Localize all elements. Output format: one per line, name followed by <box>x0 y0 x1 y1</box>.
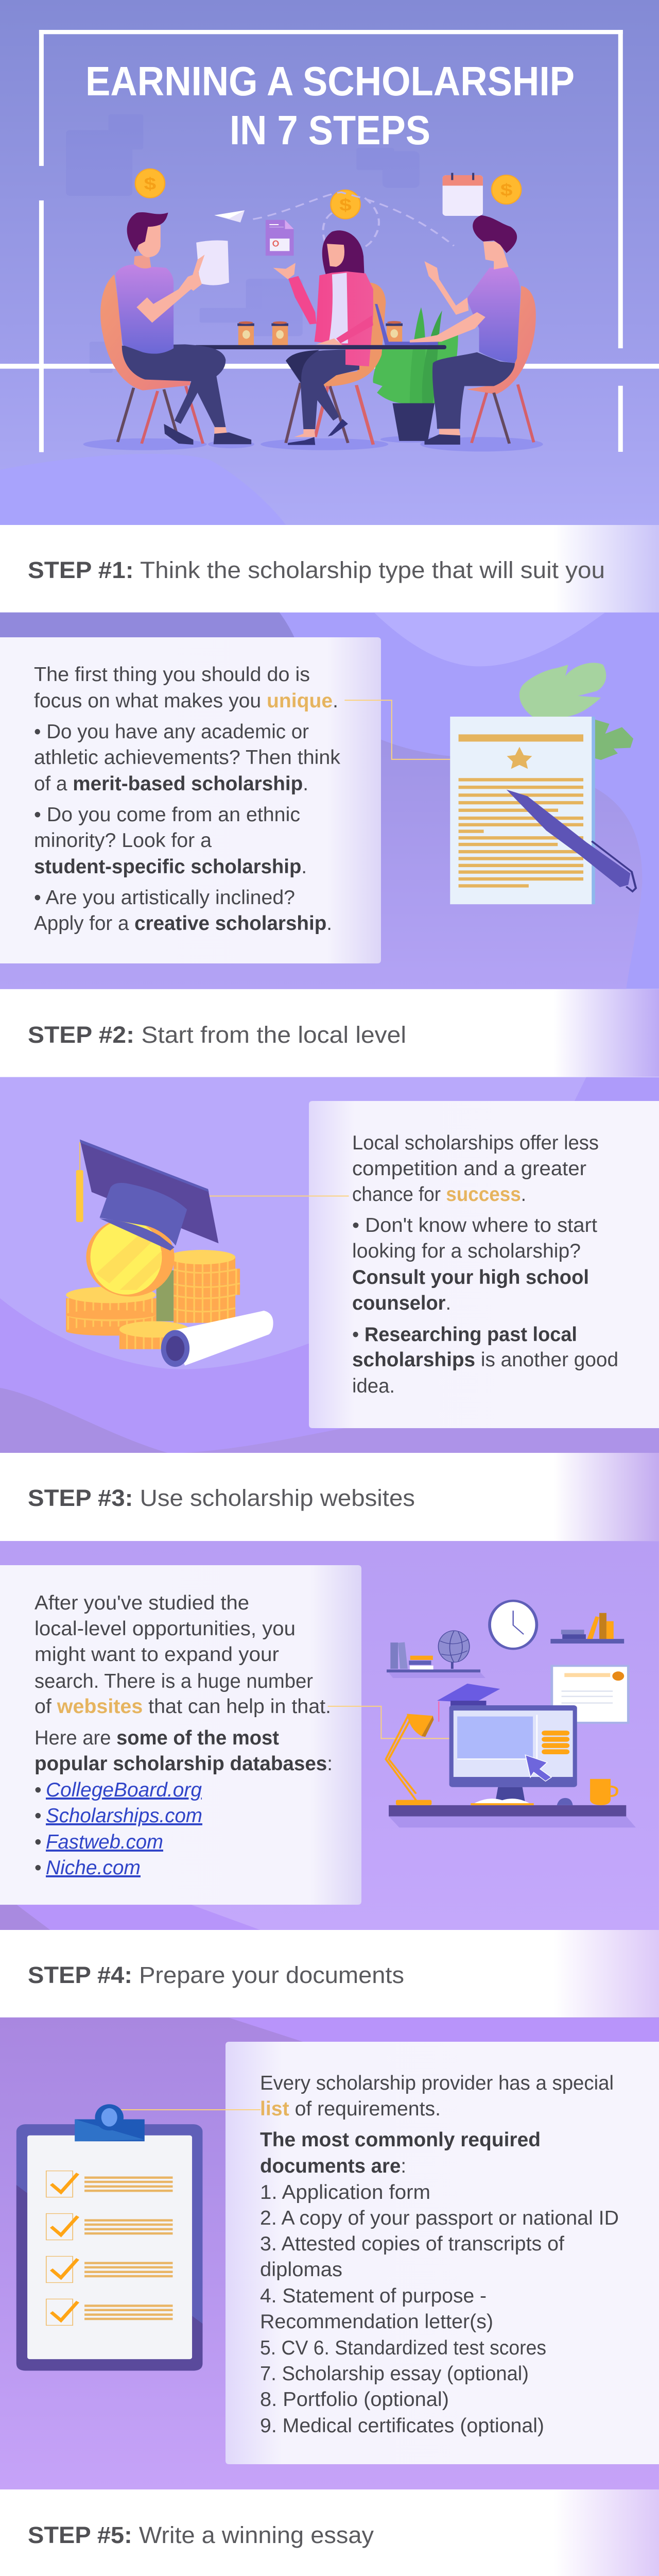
title: IN 7 STEPS <box>230 107 430 153</box>
text card <box>226 2042 659 2464</box>
text card: minority? Look for a <box>34 829 212 852</box>
text card: looking for a scholarship? <box>352 1240 581 1262</box>
text card: competition and a greater <box>352 1158 586 1180</box>
text card: 5. CV 6. Standardized test scores <box>260 2337 546 2359</box>
text card: search. There is a huge number <box>34 1670 313 1692</box>
woman with chair <box>273 230 386 445</box>
text card: focus on what makes you unique. <box>34 690 338 712</box>
text card: 2. A copy of your passport or national ID <box>260 2207 619 2229</box>
text card: of a merit-based scholarship. <box>34 773 308 795</box>
text card: After you've studied the <box>34 1592 249 1614</box>
step 5 heading: STEP #5: Write a winning essay <box>28 2522 374 2548</box>
text card <box>0 1565 361 1905</box>
text card: • Don't know where to start <box>352 1214 597 1236</box>
icon: document and pen <box>344 663 636 904</box>
text card: • <box>34 1805 42 1827</box>
text card: The first thing you should do is <box>34 664 310 686</box>
panel: step 2 <box>0 1077 659 1453</box>
floor shadows <box>83 436 543 451</box>
text card: local-level opportunities, you <box>34 1618 296 1640</box>
step 4 heading <box>0 1930 659 2018</box>
plant <box>373 307 458 441</box>
text card: • Researching past local <box>352 1324 577 1346</box>
text card: Every scholarship provider has a special <box>260 2072 614 2094</box>
text card: CollegeBoard.org <box>46 1779 202 1801</box>
step 4 heading: STEP #4: Prepare your documents <box>28 1962 404 1988</box>
step 5 heading <box>0 2489 659 2576</box>
text card: 3. Attested copies of transcripts of <box>260 2233 564 2255</box>
icon: clipboard checklist <box>16 2104 261 2370</box>
step 1 heading <box>0 525 659 613</box>
text card: documents are: <box>260 2155 406 2177</box>
man right with chair <box>410 215 536 445</box>
hero illustration <box>0 30 659 525</box>
text card: idea. <box>352 1375 395 1397</box>
coins <box>135 169 521 219</box>
man left with chair and paper <box>100 212 251 445</box>
panel: step 3 <box>0 1541 659 1930</box>
text card: • <box>34 1857 42 1879</box>
hero section <box>0 0 659 525</box>
text card: student-specific scholarship. <box>34 856 307 878</box>
text card: athletic achievements? Then think <box>34 747 340 769</box>
text card: list of requirements. <box>260 2098 441 2120</box>
text card: • Do you come from an ethnic <box>34 804 300 826</box>
text card <box>309 1101 659 1428</box>
panel: step 1 <box>0 613 659 989</box>
text card: • <box>34 1779 42 1801</box>
text card: Consult your high school <box>352 1266 589 1289</box>
text card: • Do you have any academic or <box>34 721 309 743</box>
coins: $ <box>144 175 156 194</box>
text card: • Are you artistically inclined? <box>34 887 295 909</box>
text card: The most commonly required <box>260 2129 541 2151</box>
text card: popular scholarship databases: <box>34 1753 333 1775</box>
step 2 heading: STEP #2: Start from the local level <box>28 1022 406 1048</box>
text card: Local scholarships offer less <box>352 1132 599 1154</box>
table with cups and laptop <box>237 321 403 346</box>
text card: scholarships is another good <box>352 1349 618 1371</box>
text card: might want to expand your <box>34 1643 279 1666</box>
dashed flight path <box>253 192 454 249</box>
text card: 4. Statement of purpose - <box>260 2285 487 2307</box>
checklist rows <box>46 2171 172 2325</box>
laptop <box>375 304 438 345</box>
floating document <box>266 220 294 256</box>
panel: step 4 <box>0 2018 659 2489</box>
coins: $ <box>500 181 512 200</box>
text card: counselor. <box>352 1292 451 1314</box>
paper plane <box>214 210 245 223</box>
coins: $ <box>339 196 352 215</box>
text card: Recommendation letter(s) <box>260 2311 493 2333</box>
calendar icon <box>443 173 483 216</box>
text card: Apply for a creative scholarship. <box>34 912 332 935</box>
text card: • <box>34 1831 42 1853</box>
text card: 1. Application form <box>260 2181 430 2204</box>
step 3 heading: STEP #3: Use scholarship websites <box>28 1485 415 1511</box>
text card: Niche.com <box>46 1857 141 1879</box>
text card: Scholarships.com <box>46 1805 202 1827</box>
step 1 heading: STEP #1: Think the scholarship type that will suit you <box>28 557 605 583</box>
text card: 8. Portfolio (optional) <box>260 2388 449 2411</box>
icon: graduation cap, coins and diploma <box>66 1140 349 1367</box>
text card: 9. Medical certificates (optional) <box>260 2415 544 2437</box>
text card: of websites that can help in that. <box>34 1696 331 1718</box>
text card: Here are some of the most <box>34 1727 279 1749</box>
icon: study desk with computer <box>328 1601 636 1827</box>
title <box>85 58 575 153</box>
text card: chance for success. <box>352 1183 526 1206</box>
step 3 heading <box>0 1453 659 1541</box>
picture frame <box>39 30 623 452</box>
text card: Fastweb.com <box>46 1831 163 1853</box>
text card: diplomas <box>260 2259 342 2281</box>
text card: 7. Scholarship essay (optional) <box>260 2363 529 2385</box>
text card <box>0 637 381 963</box>
title: EARNING A SCHOLARSHIP <box>85 58 575 104</box>
step 2 heading <box>0 989 659 1077</box>
